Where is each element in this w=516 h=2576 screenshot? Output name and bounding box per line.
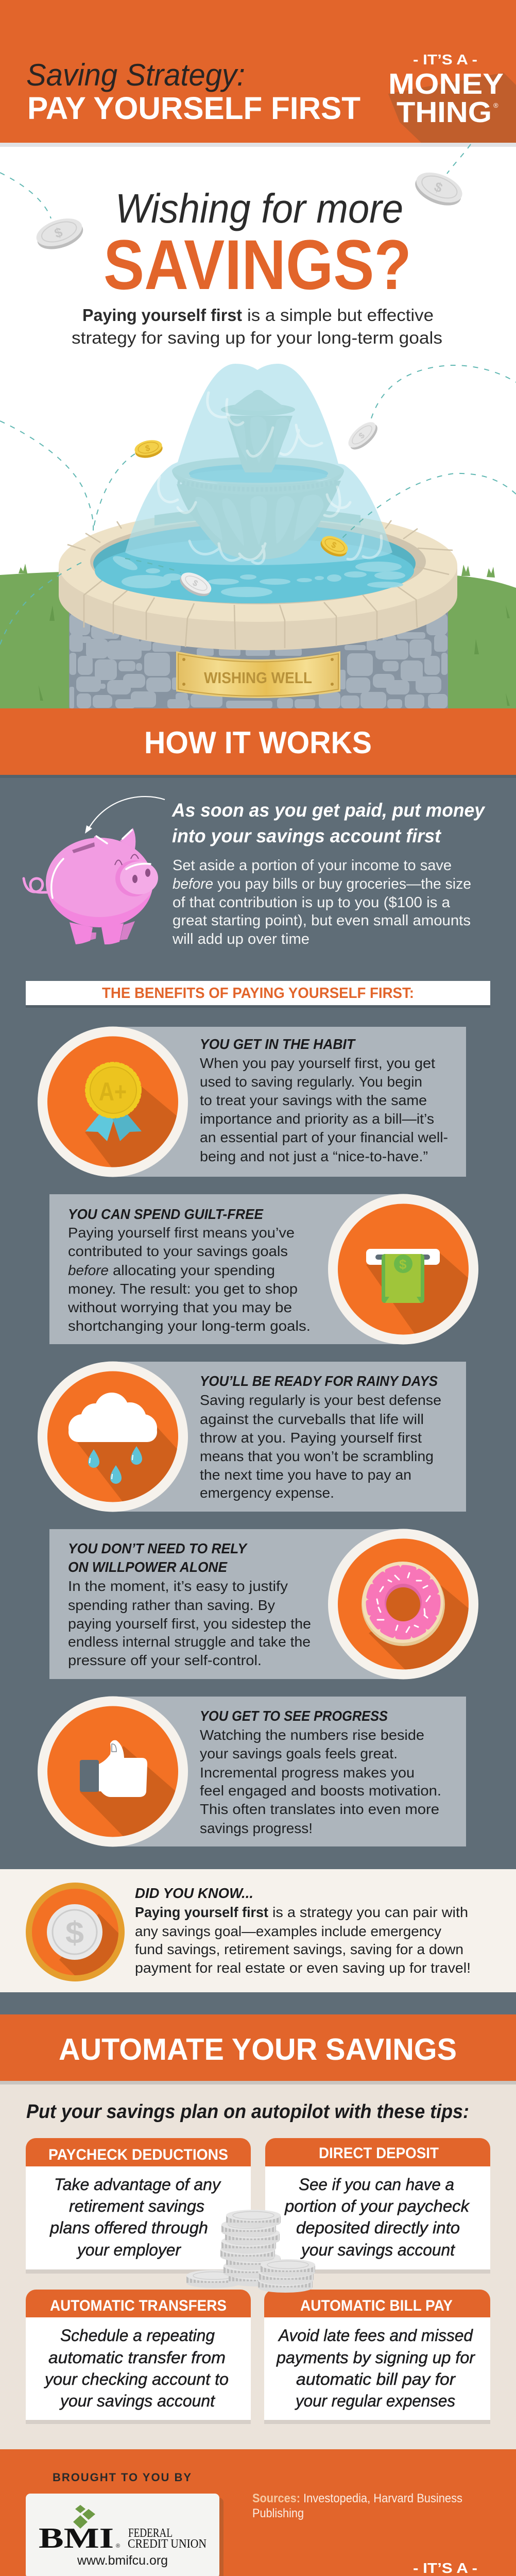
How It Works body text: you pay bills or buy groceries—the size [217, 876, 471, 892]
silver coin top right [411, 166, 467, 211]
tip: automatic bill pay: your regular expenses [295, 2392, 455, 2410]
silver coin in water [177, 568, 215, 601]
fountain [125, 364, 392, 565]
How It Works body text: will add up over time [172, 931, 309, 947]
sources: Sources: [252, 2492, 300, 2505]
wishing well plaque: WISHING WELL [204, 669, 312, 687]
text: willpower [68, 1540, 311, 1668]
It's a Money Thing logo: MONEY [388, 67, 504, 100]
tip: automatic transfers: your checking account to [44, 2370, 229, 2388]
main heading: SAVINGS? [104, 226, 411, 304]
How It Works heading band [0, 708, 516, 775]
text: willpower: YOU DON’T NEED TO RELY [68, 1540, 248, 1556]
icon: A+ ribbon [85, 1063, 142, 1141]
icon: cash from ATM slot [366, 1249, 440, 1303]
text: willpower: ON WILLPOWER ALONE [68, 1559, 228, 1575]
silver coin top left [33, 213, 87, 255]
sources [252, 2492, 462, 2520]
text: get in the habit: an essential part of your financial well- [200, 1129, 448, 1145]
silver coin top right: $ [432, 179, 445, 196]
text: rainy days: Saving regularly is your best defense [200, 1392, 441, 1408]
text: spend guilt-free: without worrying that you may be [67, 1299, 292, 1315]
How It Works body text: great starting point), but even small amounts [173, 912, 471, 929]
benefits banner [26, 981, 490, 1008]
text: willpower: In the moment, it’s easy to justify [68, 1578, 288, 1594]
tip: paycheck deductions: retirement savings [69, 2197, 204, 2215]
text: rainy days: means that you won’t be scrambling [200, 1448, 434, 1464]
water veil [125, 364, 392, 565]
panel: did you know [0, 1869, 516, 1992]
panel: spend guilt-free [49, 1194, 478, 1345]
tip: direct deposit: DIRECT DEPOSIT [319, 2145, 439, 2162]
text: spend guilt-free: contributed to your savings goals [68, 1243, 288, 1259]
tip: direct deposit: portion of your paycheck [284, 2197, 470, 2215]
intro text [72, 306, 442, 347]
icon: coin badge [26, 1883, 125, 1981]
benefits banner: THE BENEFITS OF PAYING YOURSELF FIRST: [102, 985, 414, 1002]
header title: Saving Strategy: [26, 58, 245, 92]
text: get in the habit: When you pay yourself first, you get [200, 1055, 435, 1071]
BMI logo card: www.bmifcu.org [77, 2553, 168, 2568]
text: spend guilt-free: before [68, 1262, 109, 1278]
It's a Money Thing logo [388, 52, 504, 129]
text: rainy days: against the curveballs that life will [200, 1411, 424, 1427]
sources: Publishing [252, 2506, 304, 2520]
panel: rainy days [38, 1361, 466, 1512]
text: see progress: Watching the numbers rise beside [200, 1727, 424, 1743]
wishing well stone rim [59, 510, 457, 650]
It's a Money Thing logo: THING [397, 96, 492, 129]
gold coin in water: $ [330, 540, 338, 550]
tip: automatic transfers [26, 2290, 251, 2424]
BMI logo card: ® [116, 2543, 120, 2549]
text: see progress: savings progress! [200, 1820, 313, 1836]
text: see progress: YOU GET TO SEE PROGRESS [200, 1708, 388, 1724]
sources: Investopedia, Harvard Business [303, 2492, 462, 2505]
How It Works heading band: HOW IT WORKS [144, 725, 372, 760]
coin trails: into the well [0, 365, 516, 645]
arrow into piggy bank [85, 796, 165, 834]
lower bowl [172, 457, 344, 560]
footer It's a Money Thing logo [388, 2560, 504, 2576]
text: get in the habit: YOU GET IN THE HABIT [200, 1036, 356, 1052]
icon: rain cloud [68, 1393, 157, 1484]
panel: get in the habit [38, 1026, 466, 1180]
gold coin upper left: $ [145, 444, 151, 453]
silver coin top left: $ [53, 224, 64, 241]
tip: paycheck deductions [26, 2138, 251, 2274]
header title: PAY YOURSELF FIRST [27, 91, 360, 126]
How It Works lead text: into your savings account first [172, 825, 442, 846]
text: did you know: Paying yourself first [135, 1904, 268, 1920]
silver coin in water: $ [191, 579, 199, 588]
main heading [104, 185, 411, 304]
text: see progress: your savings goals feels great. [200, 1745, 398, 1761]
text: did you know: fund savings, retirement savings, saving for a down [135, 1941, 463, 1957]
main heading: Wishing for more [115, 185, 403, 231]
tip: direct deposit [265, 2138, 490, 2274]
brought to you by: BROUGHT TO YOU BY [53, 2471, 191, 2484]
icon: coin stacks [186, 2210, 315, 2293]
text: did you know: payment for real estate or even saving up for travel! [135, 1960, 471, 1976]
How It Works lead text: As soon as you get paid, put money [171, 800, 486, 821]
text: spend guilt-free: shortchanging your long-term goals. [68, 1318, 311, 1334]
silver coin upper right [344, 418, 382, 454]
wishing well water [93, 524, 416, 603]
text: see progress: feel engaged and boosts motivation. [200, 1783, 441, 1799]
tip: automatic transfers: your savings account [59, 2392, 215, 2410]
coin trail: top right [447, 144, 471, 174]
gold coin upper left [133, 438, 164, 460]
intro text: is a simple but effective [247, 306, 434, 325]
How It Works body text: before [173, 876, 213, 892]
slate panel [0, 775, 516, 2014]
text: spend guilt-free: allocating your spending [113, 1262, 275, 1278]
tip: automatic bill pay: Avoid late fees and missed [278, 2326, 473, 2345]
text: rainy days: the next time you have to pay an [200, 1467, 411, 1483]
text: get in the habit: importance and priority as a bill—it’s [200, 1111, 434, 1127]
upper urn [221, 390, 295, 472]
How It Works body text: Set aside a portion of your income to save [173, 857, 452, 874]
tip: automatic bill pay: AUTOMATIC BILL PAY [300, 2297, 453, 2314]
text: get in the habit: to treat your savings with the same [200, 1092, 427, 1108]
icon: A+ ribbon: A+ [99, 1077, 127, 1106]
text: spend guilt-free: Paying yourself first means you’ve [68, 1225, 295, 1241]
icon: thumbs up [80, 1740, 147, 1797]
gold coin in water [318, 532, 351, 560]
text: willpower: paying yourself first, you sidestep the [68, 1616, 311, 1632]
How It Works body text: of that contribution is up to you ($100 is a [173, 894, 451, 911]
text: willpower: pressure off your self-control. [68, 1652, 262, 1668]
Automate Your Savings heading band [0, 2014, 516, 2084]
water splashes [158, 393, 382, 564]
tips heading: Put your savings plan on autopilot with these tips: [26, 2101, 469, 2123]
BMI logo card [26, 2494, 223, 2576]
text: rainy days: throw at you. Paying yourself first [200, 1430, 422, 1446]
panel: see progress [38, 1696, 466, 1846]
BMI logo card: CREDIT UNION [128, 2537, 207, 2551]
intro text: Paying yourself first [82, 306, 242, 325]
panel: willpower [49, 1529, 478, 1680]
icon: piggy bank [24, 821, 159, 944]
tip: automatic transfers: Schedule a repeating [60, 2326, 215, 2345]
text: did you know: any savings goal—examples include emergency [135, 1923, 441, 1939]
text: get in the habit: being and not just a “nice-to-have.” [200, 1148, 428, 1164]
tip: automatic bill pay [264, 2290, 490, 2424]
wishing well plaque [176, 651, 340, 698]
text: willpower: spending rather than saving. By [68, 1597, 275, 1613]
How It Works body text [172, 857, 471, 947]
text: willpower: endless internal struggle and take the [68, 1634, 311, 1650]
tip: automatic transfers: automatic transfer from [48, 2348, 226, 2367]
text: see progress [200, 1708, 441, 1836]
panel: autopilot tips [0, 2084, 516, 2449]
text: get in the habit [200, 1036, 448, 1164]
footer band [0, 2449, 516, 2576]
text: did you know [135, 1885, 471, 1976]
text: rainy days [200, 1373, 441, 1501]
text: rainy days: YOU’LL BE READY FOR RAINY DAYS [200, 1373, 438, 1389]
tip: direct deposit: See if you can have a [299, 2175, 454, 2194]
Automate Your Savings heading band: AUTOMATE YOUR SAVINGS [59, 2032, 457, 2066]
icon: BMI diamonds [73, 2505, 95, 2529]
tip: automatic bill pay: automatic bill pay for [296, 2370, 456, 2388]
intro text: strategy for saving up for your long-term goals [72, 328, 442, 347]
header band [0, 0, 516, 147]
text: get in the habit: used to saving regularly. You begin [200, 1074, 422, 1090]
header logo shadow [388, 73, 516, 143]
icon: donut [362, 1562, 445, 1646]
text: did you know: DID YOU KNOW... [135, 1885, 253, 1901]
text: rainy days: emergency expense. [200, 1485, 334, 1501]
tip: direct deposit: your savings account [300, 2241, 455, 2259]
basin back under veil [154, 507, 360, 526]
tip: paycheck deductions: PAYCHECK DEDUCTIONS [48, 2146, 228, 2163]
tip: automatic bill pay: payments by signing up for [276, 2348, 475, 2367]
tip: paycheck deductions: your employer [76, 2241, 181, 2259]
tip: paycheck deductions: Take advantage of any [54, 2175, 221, 2194]
BMI logo card: BMI [39, 2522, 114, 2554]
silver coin upper right: $ [357, 431, 367, 440]
ground [0, 564, 516, 708]
text: spend guilt-free: YOU CAN SPEND GUILT-FREE [68, 1206, 264, 1222]
tip: direct deposit: deposited directly into [296, 2218, 460, 2237]
It's a Money Thing logo: ® [493, 101, 498, 109]
header title [26, 58, 360, 126]
wishing well stone wall [69, 603, 448, 708]
text: spend guilt-free [67, 1206, 311, 1334]
BMI logo card: FEDERAL [128, 2527, 173, 2540]
icon: cash from ATM slot: $ [399, 1257, 407, 1272]
icon: coin badge: $ [65, 1916, 84, 1950]
It's a Money Thing logo: - IT’S A - [413, 52, 477, 67]
text: see progress: Incremental progress makes you [200, 1765, 415, 1781]
text: spend guilt-free: money. The result: you get to shop [68, 1281, 298, 1297]
tip: paycheck deductions: plans offered through [49, 2218, 208, 2237]
coin trail: top left [0, 173, 51, 218]
text: did you know: is a strategy you can pair with [272, 1904, 468, 1920]
How It Works lead text [171, 800, 486, 846]
footer It's a Money Thing logo: - IT’S A - [413, 2560, 477, 2576]
tip: automatic transfers: AUTOMATIC TRANSFERS [50, 2297, 227, 2314]
text: see progress: This often translates into even more [200, 1801, 439, 1817]
